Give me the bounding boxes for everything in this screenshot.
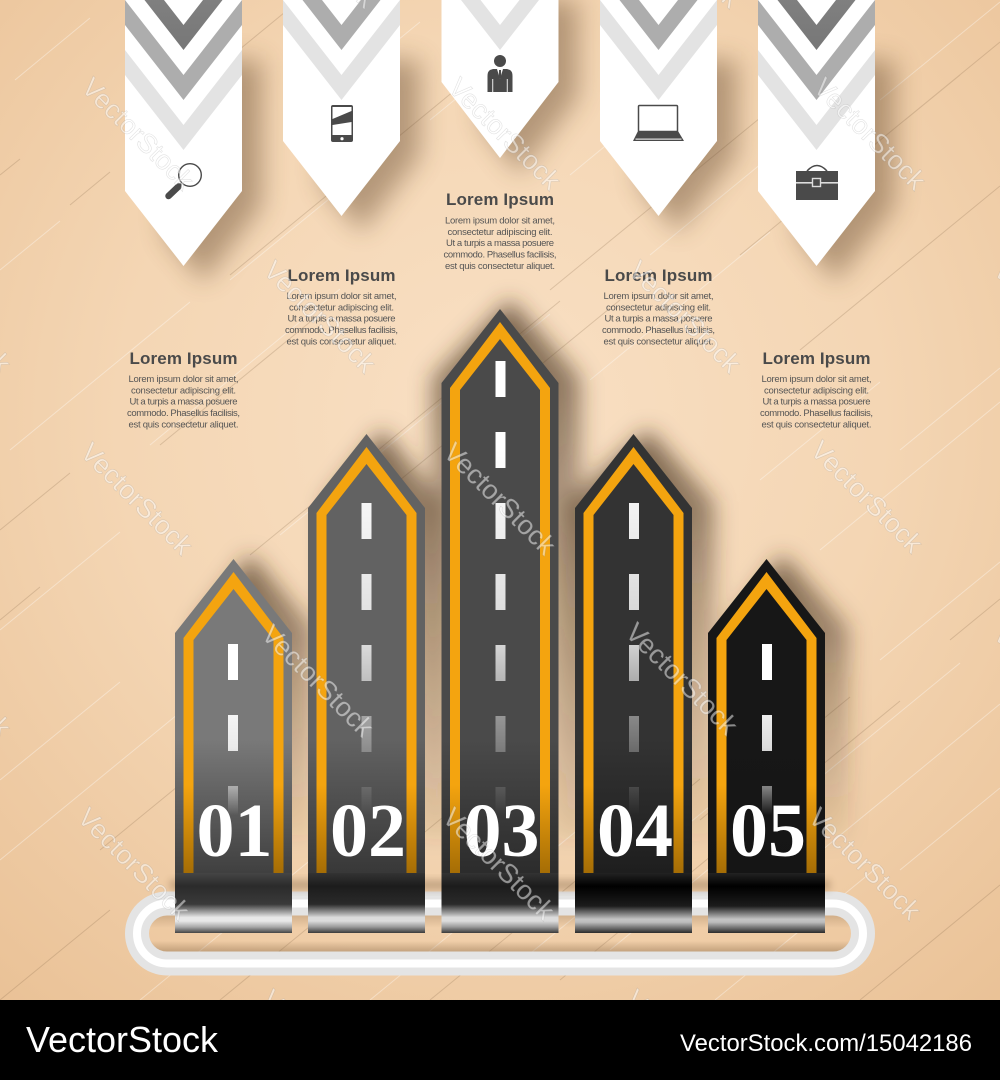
banner shadows: [165, 0, 895, 282]
text block 1: est quis consectetur aliquet.: [128, 419, 238, 430]
icon: businessman: [488, 55, 512, 92]
watermarks: VectorStock: [258, 255, 382, 379]
looped track: [137, 904, 863, 964]
text block 2: commodo. Phasellus facilisis,: [285, 325, 398, 336]
watermarks: VectorStock: [256, 619, 380, 743]
text block 3: est quis consectetur aliquet.: [445, 261, 555, 272]
text block 4: [602, 266, 715, 347]
text block 4: Ut a turpis a massa posuere: [604, 314, 712, 325]
watermarks: VectorStock: [620, 617, 744, 741]
text block 3: Ut a turpis a massa posuere: [446, 238, 554, 249]
watermarks: VectorStock: [72, 802, 196, 926]
icon: magnifier: [168, 164, 201, 196]
text block 5: Ut a turpis a massa posuere: [762, 397, 870, 408]
text block 2: Lorem ipsum dolor sit amet,: [286, 291, 396, 302]
text block 2: Lorem Ipsum: [288, 266, 396, 285]
text block 5: Lorem ipsum dolor sit amet,: [762, 374, 872, 385]
footer bar: [0, 1000, 1000, 1080]
text block 3: consectetur adipiscing elit.: [448, 227, 552, 238]
banner 2: phone: [283, 0, 400, 216]
banner 1: search: [125, 0, 242, 266]
text block 1: Ut a turpis a massa posuere: [130, 397, 238, 408]
road 4: [575, 434, 692, 933]
icon: laptop: [633, 106, 684, 141]
text block 4: commodo. Phasellus facilisis,: [602, 325, 715, 336]
text block 2: Ut a turpis a massa posuere: [288, 314, 396, 325]
text block 1: Lorem ipsum dolor sit amet,: [128, 374, 238, 385]
number 04: 04: [597, 789, 673, 873]
text block 2: consectetur adipiscing elit.: [289, 302, 394, 313]
number 05: 05: [730, 789, 806, 873]
watermarks: VectorStock: [623, 255, 747, 379]
footer image id: VectorStock.com/15042186: [680, 1030, 972, 1057]
text block 1: [127, 349, 240, 430]
text block 4: Lorem Ipsum: [604, 266, 712, 285]
icon: smartphone: [331, 105, 353, 142]
number 02: 02: [330, 789, 406, 873]
text block 2: est quis consectetur aliquet.: [286, 336, 396, 347]
number 01: 01: [196, 789, 272, 873]
watermarks: VectorStock: [805, 435, 929, 559]
text block 5: Lorem Ipsum: [762, 349, 870, 368]
text block 1: commodo. Phasellus facilisis,: [127, 408, 240, 419]
text block 5: [760, 349, 873, 430]
road shadows: [195, 300, 848, 840]
text block 3: Lorem Ipsum: [446, 190, 554, 209]
text block 5: consectetur adipiscing elit.: [764, 385, 869, 396]
road 5: [708, 559, 825, 933]
road fold shadow: [170, 880, 830, 890]
watermarks: VectorStock: [437, 802, 561, 926]
text block 4: Lorem ipsum dolor sit amet,: [604, 291, 714, 302]
text block 1: consectetur adipiscing elit.: [131, 385, 236, 396]
watermarks: VectorStock: [443, 72, 567, 196]
footer brand: VectorStock: [26, 1019, 219, 1060]
banner 3: person: [442, 0, 558, 158]
icon: briefcase: [796, 166, 838, 200]
banner 5: briefcase: [758, 0, 875, 266]
watermarks: VectorStock: [76, 72, 200, 196]
banner 4: laptop: [600, 0, 717, 216]
text block 3: Lorem ipsum dolor sit amet,: [445, 216, 555, 226]
text block 5: est quis consectetur aliquet.: [762, 419, 872, 430]
text block 3: commodo. Phasellus facilisis,: [444, 250, 556, 260]
watermarks: VectorStock: [808, 72, 932, 196]
text block 4: est quis consectetur aliquet.: [604, 336, 714, 347]
road 3: [442, 309, 558, 933]
text block 2: [285, 266, 398, 347]
road 1: [175, 559, 292, 933]
watermarks: VectorStock: [75, 437, 199, 561]
text block 4: consectetur adipiscing elit.: [606, 302, 711, 313]
number 03: 03: [464, 789, 540, 873]
text block 3: [444, 190, 556, 272]
text block 1: Lorem Ipsum: [130, 349, 238, 368]
watermarks: VectorStock: [438, 437, 562, 561]
watermarks: VectorStock: [803, 802, 927, 926]
road 2: [308, 434, 425, 933]
text block 5: commodo. Phasellus facilisis,: [760, 408, 873, 419]
